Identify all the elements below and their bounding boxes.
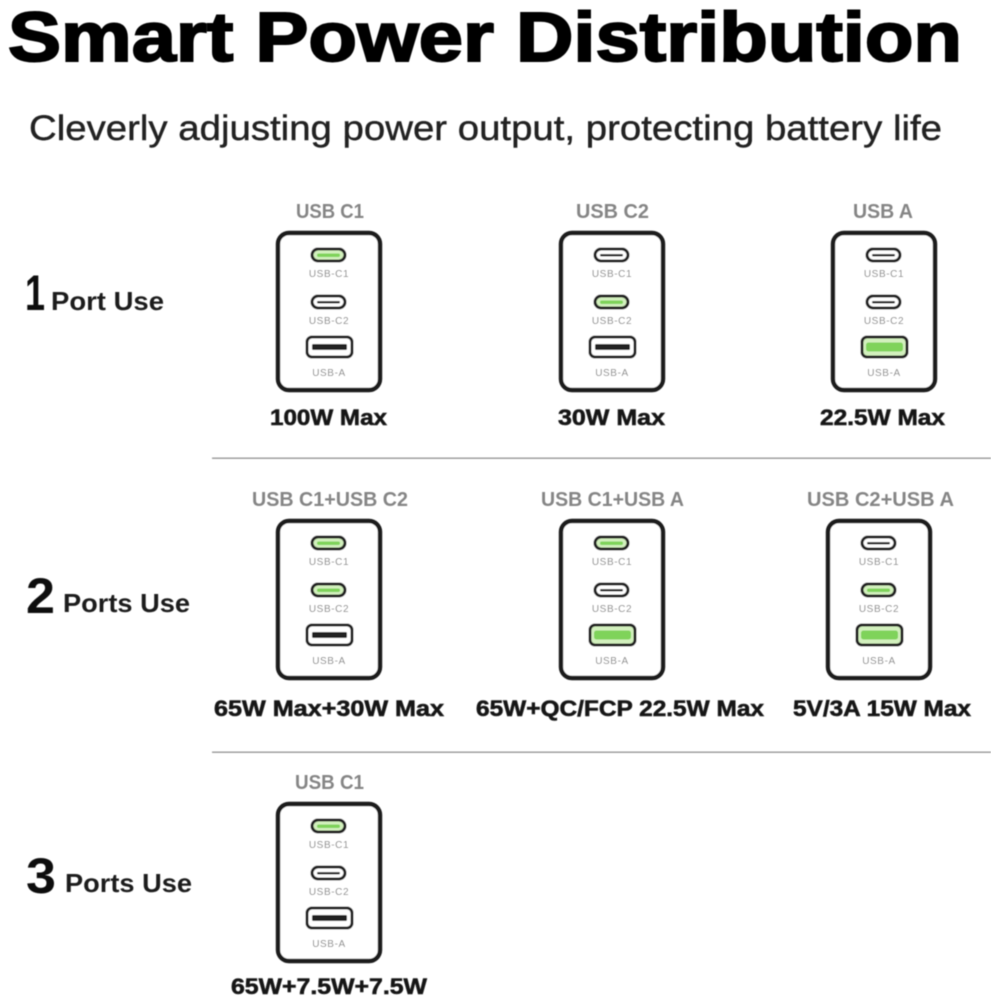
charger: USB C2 lit: USB-A (595, 368, 629, 379)
subtitle: Cleverly adjusting power output, protecting battery life (29, 109, 942, 148)
row label: 3 Ports Use: 3 (26, 848, 56, 904)
charger: USB C1 + USB C2 lit: USB-A (312, 656, 346, 667)
charger: USB A lit (833, 233, 935, 390)
charger: USB C1 + USB A lit: USB-C1 (592, 557, 632, 568)
charger: USB C1 lit: USB-C2 (309, 316, 349, 327)
charger: USB C1 lit: USB-C1 (309, 269, 349, 280)
charger: USB C1 lit (three ports): USB-A (312, 939, 346, 950)
row label: 2 Ports Use (26, 568, 190, 624)
heading: USB C1 (three ports): USB C1 (295, 772, 364, 794)
value: 65W+7.5W+7.5W: 65W+7.5W+7.5W (231, 974, 427, 999)
charger: USB C1 lit (278, 233, 380, 390)
charger: USB C1 + USB C2 lit: USB-C1 (309, 557, 349, 568)
value: 65W+QC/FCP 22.5W Max: 65W+QC/FCP 22.5W Max (476, 696, 765, 721)
charger: USB C2 + USB A lit (828, 521, 930, 678)
charger: USB C2 + USB A lit: USB-A (862, 656, 896, 667)
heading: USB C1+USB C2: USB C1+USB C2 (252, 489, 408, 511)
row label: 1 Port Use (25, 265, 164, 321)
charger: USB C2 + USB A lit: USB-C2 (859, 604, 899, 615)
charger: USB C1 lit (three ports): USB-C2 (309, 887, 349, 898)
charger: USB A lit: USB-C1 (864, 269, 904, 280)
charger: USB C2 lit (561, 233, 663, 390)
title: Smart Power Distribution (8, 0, 962, 76)
charger: USB C1 + USB A lit: USB-A (595, 656, 629, 667)
row label: 1 Port Use: Port Use (51, 286, 164, 316)
charger: USB C1 + USB A lit: USB-C2 (592, 604, 632, 615)
value: 30W Max: 30W Max (558, 405, 666, 430)
row label: 2 Ports Use: Ports Use (63, 588, 190, 618)
charger: USB C1 + USB A lit (561, 521, 663, 678)
heading: USB C2+USB A: USB C2+USB A (807, 489, 954, 511)
charger: USB C2 lit: USB-C2 (592, 316, 632, 327)
value: 65W Max+30W Max: 65W Max+30W Max (214, 696, 445, 721)
heading: USB C2: USB C2 (576, 201, 649, 223)
charger: USB C1 + USB C2 lit (278, 521, 380, 678)
row label: 3 Ports Use: Ports Use (65, 868, 192, 898)
row label: 1 Port Use: 1 (25, 265, 45, 321)
value: 22.5W Max: 22.5W Max (820, 405, 946, 430)
charger: USB C2 + USB A lit: USB-C1 (859, 557, 899, 568)
charger: USB C1 + USB C2 lit: USB-C2 (309, 604, 349, 615)
charger: USB A lit: USB-A (867, 368, 901, 379)
heading: USB C1+USB A: USB C1+USB A (541, 489, 684, 511)
value: 100W Max: 100W Max (270, 405, 388, 430)
heading: USB C1: USB C1 (296, 201, 364, 223)
charger: USB C1 lit (three ports): USB-C1 (309, 840, 349, 851)
row label: 2 Ports Use: 2 (26, 568, 55, 624)
charger: USB C1 lit (three ports) (278, 804, 380, 961)
charger: USB C2 lit: USB-C1 (592, 269, 632, 280)
value: 5V/3A 15W Max: 5V/3A 15W Max (793, 696, 972, 721)
row label: 3 Ports Use (26, 848, 192, 904)
charger: USB C1 lit: USB-A (312, 368, 346, 379)
heading: USB A: USB A (853, 201, 913, 223)
charger: USB A lit: USB-C2 (864, 316, 904, 327)
